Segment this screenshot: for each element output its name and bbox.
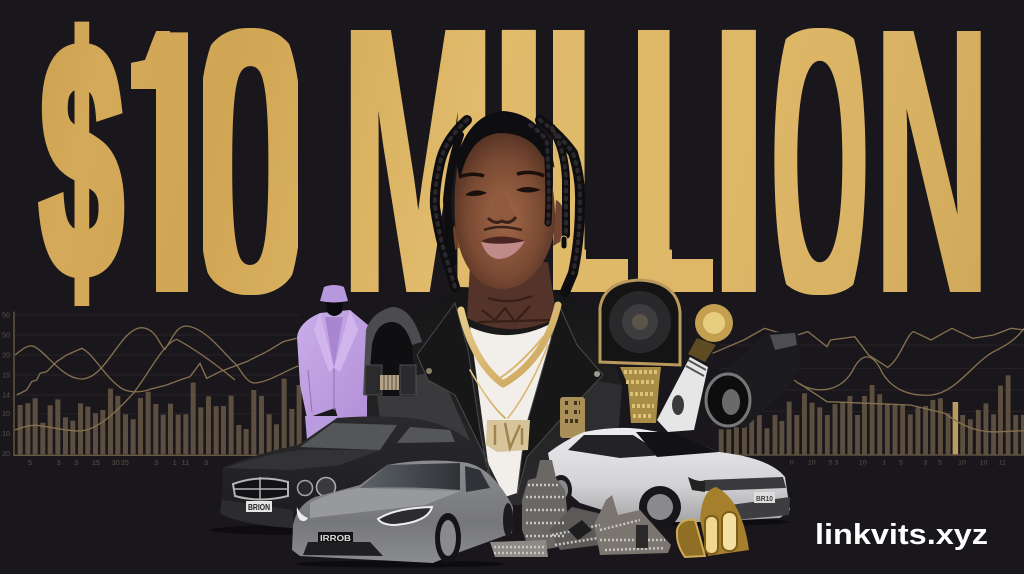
purple bucket hat: [320, 285, 348, 302]
front grille: [705, 477, 786, 491]
right bar series: [719, 375, 1024, 454]
right axis labels: 11: [999, 460, 1006, 467]
eyes and brows: [459, 172, 544, 196]
icon: gold speaker ornament: [600, 280, 680, 423]
hood highlight: [310, 488, 460, 518]
title: $10 MILLION: [38, 22, 981, 306]
left axis labels: 1: [173, 458, 177, 467]
left trend lines: [15, 326, 298, 431]
face: [455, 130, 555, 289]
figure: man with braids: [367, 112, 622, 505]
right axis labels: 5: [899, 460, 903, 467]
left axis labels: [2, 310, 208, 467]
lapel right: [517, 307, 603, 495]
headlights: [297, 507, 308, 521]
mask face: [326, 300, 343, 316]
braided hair: [435, 112, 580, 292]
chart: left bars and lines: [2, 310, 302, 467]
left axis labels: 15: [92, 458, 100, 467]
gold letters ornament: [677, 487, 749, 557]
left axis labels: 3: [204, 458, 208, 467]
left axis labels: 10: [2, 429, 10, 438]
left axis labels: 3: [74, 458, 78, 467]
right axis labels: 1: [883, 460, 887, 467]
silver jewelry pile: [490, 460, 671, 557]
gold medallion: [560, 397, 585, 438]
left axis labels: 5: [28, 458, 32, 467]
leather jacket: [367, 287, 622, 505]
front grille: [233, 478, 288, 500]
left axis labels: 20: [2, 350, 10, 359]
left axis labels: 11: [182, 458, 189, 467]
white t-shirt: [470, 323, 552, 497]
pants: [305, 416, 338, 440]
earring: [561, 236, 567, 249]
chart: right bars and lines: [712, 328, 1024, 467]
right axis labels: 3: [923, 460, 928, 467]
wheels: [639, 486, 681, 528]
number plate: [246, 501, 272, 512]
nose: [488, 195, 516, 222]
neck with tattoos: [467, 262, 557, 329]
left axis labels: 3: [154, 458, 158, 467]
inner shirt: [325, 317, 343, 368]
left axis labels: 15: [2, 370, 10, 379]
watermark: linkvits.xyz: linkvits.xyz: [815, 519, 988, 551]
car: grey sports car: [292, 461, 513, 568]
left axis labels: 14: [2, 390, 10, 399]
headlights: [298, 480, 312, 496]
right trend lines: [712, 328, 1024, 432]
car: black sedan: BRION: [248, 503, 270, 512]
right axis labels: 10: [808, 460, 816, 467]
car: white SUV: [548, 428, 790, 528]
car: black sedan: [210, 416, 488, 535]
number plate: [318, 532, 353, 543]
lapel left: [417, 303, 493, 500]
left axis labels: 30: [112, 458, 120, 467]
gold pendant: [486, 420, 530, 452]
left axis labels: 50: [2, 330, 10, 339]
left bar series: [18, 379, 302, 454]
gold chains: [461, 305, 558, 420]
ears: [553, 200, 564, 246]
car: grey sports car: IRROB: [320, 534, 351, 543]
figure: purple suit: [297, 285, 368, 440]
icon: gold watch: [657, 304, 733, 432]
left axis labels: 50: [2, 310, 10, 319]
right axis labels: 5 3: [829, 460, 839, 467]
windshield: [360, 463, 460, 490]
left axis labels: 20: [2, 449, 10, 458]
car: white SUV: BR10: [756, 496, 773, 503]
right axis labels: 10: [958, 460, 966, 467]
right axis labels: 10: [859, 460, 867, 467]
lapels: [314, 310, 358, 372]
jacket body: [297, 310, 368, 418]
jacket rivets: [426, 368, 432, 374]
right axis labels: 0: [790, 460, 794, 467]
right axis labels: 5: [938, 460, 942, 467]
wheels: [435, 513, 461, 563]
right axis labels: 10: [980, 460, 988, 467]
icon: dark helmet: [363, 307, 422, 396]
front bumper: [220, 500, 293, 528]
number plate: [754, 492, 775, 503]
left axis labels: 3: [57, 458, 61, 467]
mouth and moustache: [481, 227, 525, 259]
front grille: [303, 542, 383, 556]
right axis labels: [790, 460, 1006, 467]
left axis labels: 10: [2, 409, 10, 418]
icon: black camera: [705, 332, 801, 428]
left axis labels: 35: [121, 458, 129, 467]
